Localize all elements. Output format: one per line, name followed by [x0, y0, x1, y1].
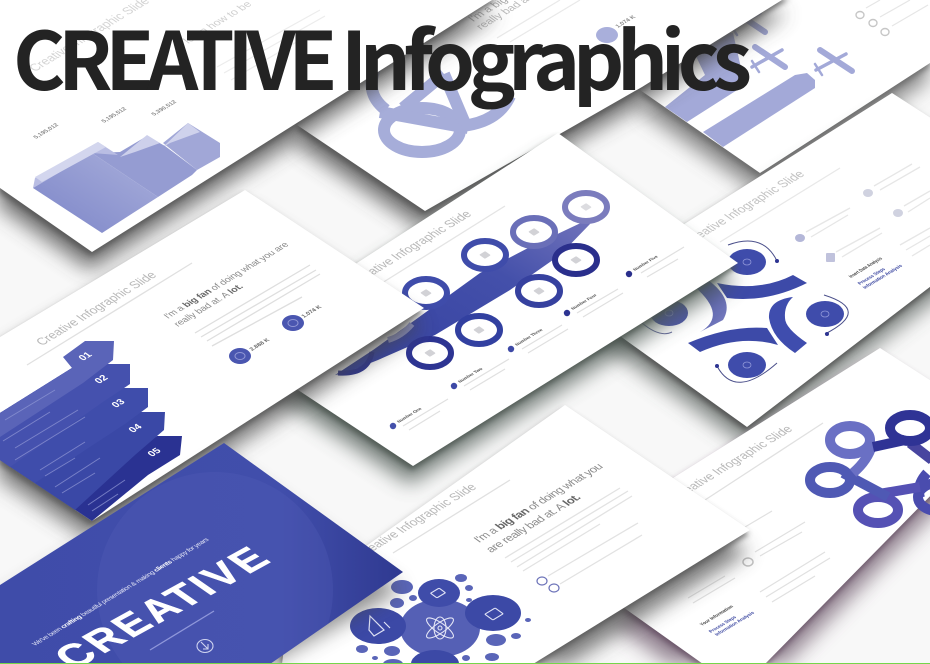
knot diagram	[372, 62, 510, 152]
number 02: 02	[93, 373, 111, 386]
text lines	[866, 0, 928, 26]
ring: upper two	[464, 241, 506, 269]
band 04 with arrow head	[0, 368, 165, 510]
arrow: bottom	[715, 363, 777, 382]
headline second line: really bad at. A lot.	[172, 282, 246, 329]
band text lines	[3, 390, 125, 511]
headline first line: I'm a big fan of doing what you	[472, 462, 606, 545]
number 04: 04	[127, 422, 145, 435]
panel: bottom-center slide with bubbles	[280, 405, 750, 664]
central bar	[335, 220, 590, 375]
bubble diagram	[350, 574, 531, 664]
body text lines	[505, 488, 642, 584]
cover subtitle line	[150, 611, 214, 650]
label: process steps: Process Steps	[857, 267, 887, 286]
arc: left	[695, 280, 727, 332]
icon: plane two	[752, 47, 785, 72]
label: your information: Your Information	[699, 604, 735, 627]
stat value one: 2.888 K	[249, 337, 272, 352]
bar labels: 5,195,512	[101, 106, 129, 124]
ring: upper four	[565, 193, 607, 221]
ring: top-right	[890, 415, 930, 441]
stat value: 1.074 K	[615, 14, 638, 29]
legend item: number five: Number Five	[632, 254, 660, 272]
bar chart: second block	[92, 135, 197, 197]
ring: bottom	[858, 497, 898, 523]
label: insert data analysis: Insert Data Analysis	[848, 256, 884, 279]
slide title: Creative Infographic Slide	[668, 423, 796, 502]
band 02 with arrow head	[0, 364, 130, 467]
panel: center slide with rings	[227, 133, 738, 484]
panel: blue cover slide	[0, 443, 403, 664]
ring: upper three	[513, 218, 555, 246]
green bottom strip	[0, 663, 930, 664]
panel: left slide with numbered arrows	[0, 190, 424, 539]
slide title: Creative Infographic Slide	[680, 168, 808, 247]
legend item: number one: Number One	[396, 406, 423, 424]
bottom bubble	[411, 650, 459, 664]
ring: left	[810, 467, 850, 493]
text lines	[688, 511, 830, 603]
title: CREATIVE Infographics	[13, 0, 752, 114]
headline fragment: I learn how to be	[176, 0, 255, 49]
stat icon one	[229, 348, 251, 364]
headline second line: are really bad at. A lot.	[484, 493, 584, 555]
bar labels: 5,390,512	[151, 99, 179, 117]
title underline	[382, 206, 505, 283]
arc: top	[717, 275, 807, 299]
panel: top-left slide with 3D bars	[0, 0, 500, 270]
circle with icon: bottom	[728, 352, 766, 378]
title underline	[720, 168, 840, 242]
icon: megaphone	[369, 616, 390, 636]
title underline	[393, 480, 510, 553]
arrow: left	[642, 323, 672, 334]
right bubble	[465, 595, 521, 631]
ring: right	[918, 483, 930, 511]
circle with icon: right	[806, 301, 844, 327]
legend item: number four	[564, 289, 623, 317]
label: information analysis: Information Analysis	[714, 611, 756, 637]
slide title: Creative Infographic Slide	[352, 481, 480, 560]
icon: document right	[485, 608, 503, 620]
number 03: 03	[110, 397, 128, 410]
ring: lower two	[458, 316, 500, 344]
arc: right	[769, 297, 807, 353]
check icons	[537, 577, 559, 592]
connector: bottom ring	[873, 487, 920, 495]
circle with icon: left	[650, 300, 688, 326]
ring: upper one	[405, 279, 447, 307]
headline first line: I'm a big fan of doing what you are	[162, 240, 292, 321]
band 03 with arrow head	[0, 368, 148, 483]
icon: circled arrow	[197, 640, 213, 652]
slide title: Creative Infographic Slide	[32, 269, 160, 348]
connector: top-right ring to edge	[910, 443, 930, 460]
legend item: number two	[451, 359, 509, 390]
cover tagline: We've been crafting beautiful presentation & making clients happy for years	[31, 537, 211, 647]
stat value two: 1.074 K	[301, 304, 324, 319]
decorative lighter arc	[97, 472, 333, 664]
ring: lower one	[409, 339, 451, 367]
text lines	[497, 0, 580, 42]
panel: top-right slide with planes	[637, 0, 930, 191]
bar: upper arrow	[665, 32, 745, 122]
number 05: 05	[146, 446, 164, 459]
connector: right ring	[919, 473, 927, 498]
connector: top-left ring	[853, 445, 872, 473]
title underline	[27, 263, 192, 365]
icons: small outline circles	[856, 12, 889, 36]
icon: plane one	[730, 12, 765, 35]
arrow: top	[728, 241, 779, 263]
legend item: number five	[626, 247, 684, 277]
ring: lower four	[555, 246, 597, 274]
icon: circle outline	[743, 558, 753, 566]
panel: bottom-right slide with knot	[618, 348, 930, 664]
legend item: number three: Number Three	[514, 328, 544, 347]
bar labels	[33, 99, 179, 140]
icon: atom	[424, 615, 456, 641]
stat icon	[596, 27, 618, 43]
feature text lines	[806, 164, 930, 257]
panel: top-center slide with knot	[294, 0, 790, 229]
legend item: number three	[508, 325, 568, 353]
icon: document top	[431, 588, 445, 598]
connector: left ring	[843, 473, 888, 497]
slide title: Creative Infographic Slide	[347, 208, 475, 287]
bar labels: 5,195,012	[33, 122, 61, 140]
small bubbles	[356, 574, 531, 664]
curved bar end	[338, 352, 372, 373]
legend item: number one	[390, 399, 448, 430]
faded ring	[388, 324, 412, 340]
bar chart: first block	[33, 142, 158, 233]
arc: bottom	[688, 328, 778, 352]
left bubble	[350, 608, 406, 644]
label: information analysis: Information Analysis	[862, 264, 904, 290]
knot diagram	[810, 415, 930, 523]
label: process steps: Process Steps	[708, 615, 738, 634]
number 01: 01	[77, 350, 95, 363]
icon: plane three	[815, 50, 852, 75]
connector: top-right ring	[873, 440, 905, 447]
stat icon two	[282, 315, 304, 331]
circle with icon: top	[728, 249, 766, 275]
panel: right slide with four arcs	[565, 93, 930, 445]
legend item: number two: Number Two	[457, 367, 484, 384]
bar chart: third block	[163, 123, 220, 170]
legend item: number four: Number Four	[570, 293, 598, 311]
top bubble	[418, 579, 460, 607]
band 05 with arrow head	[0, 368, 182, 521]
band 01 with arrow head	[0, 341, 114, 437]
arrow: right	[824, 295, 848, 336]
ring: lower three	[518, 277, 560, 305]
bar: lower arrow	[703, 73, 815, 147]
center bubble	[400, 599, 480, 657]
title underline	[705, 423, 823, 500]
feature icons	[795, 189, 903, 262]
ring: top-left	[830, 426, 870, 454]
text lines	[217, 10, 325, 80]
body text lines	[195, 265, 320, 346]
